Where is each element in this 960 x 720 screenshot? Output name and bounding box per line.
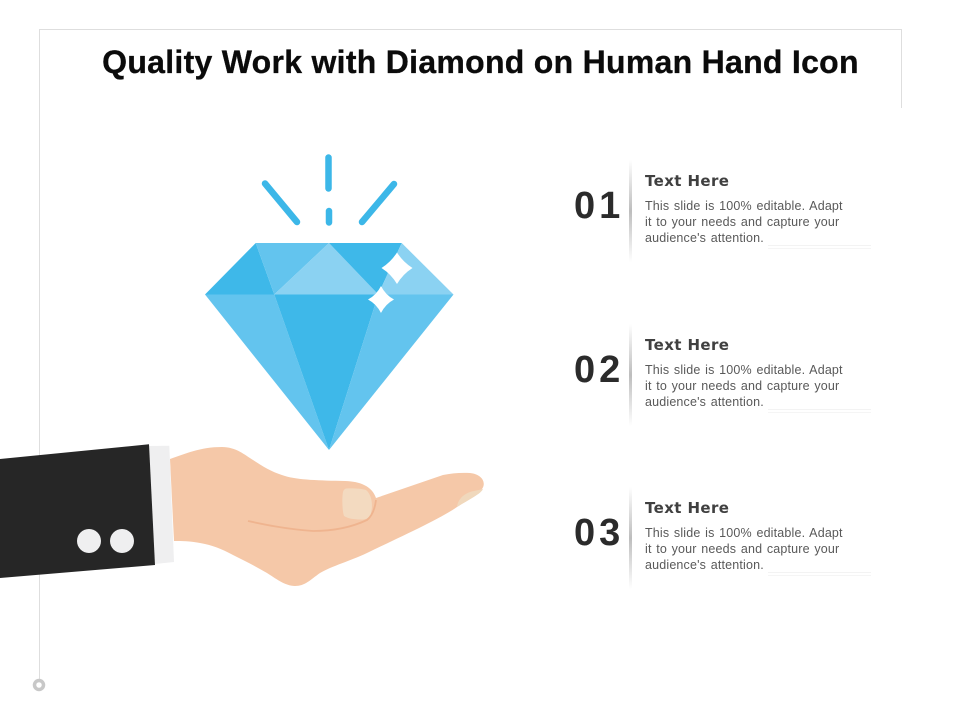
text block 03: audience's attention. [645, 558, 764, 572]
text block 01: it to your needs and capture your [645, 215, 839, 229]
text block 02: This slide is 100% editable. Adapt [645, 363, 843, 377]
heading 01: Text Here [645, 172, 729, 190]
icon: jacket sleeve [0, 444, 155, 578]
icon: large sparkle [382, 252, 412, 284]
icon: diamond [205, 243, 454, 450]
palm crease [248, 500, 376, 531]
illustration: diamond on hand [0, 154, 484, 586]
text block 01: This slide is 100% editable. Adapt [645, 199, 843, 213]
text block 02: audience's attention. [645, 395, 764, 409]
icon: small sparkle [368, 286, 394, 313]
text block 02 [645, 363, 843, 409]
icon: finger nail [457, 489, 483, 507]
icon: sparkle rays [265, 158, 394, 222]
heading 02: Text Here [645, 336, 729, 354]
number 03: 03 [574, 512, 624, 554]
heading 03: Text Here [645, 499, 729, 517]
text block 02: it to your needs and capture your [645, 379, 839, 393]
item 03 [574, 493, 871, 582]
text block 03: This slide is 100% editable. Adapt [645, 526, 843, 540]
icon: shirt cuff [149, 446, 174, 564]
icon: sleeve buttons [77, 529, 134, 553]
text block 03: it to your needs and capture your [645, 542, 839, 556]
title: Quality Work with Diamond on Human Hand Icon [102, 44, 859, 80]
icon: hand [170, 447, 484, 586]
number 02: 02 [574, 349, 624, 391]
icon: thumb nail [342, 488, 372, 520]
text block 03 [645, 526, 843, 572]
item 02 [574, 330, 871, 420]
item 01 [574, 166, 871, 256]
text block 01 [645, 199, 843, 245]
text block 01: audience's attention. [645, 231, 764, 245]
number 01: 01 [574, 185, 624, 227]
